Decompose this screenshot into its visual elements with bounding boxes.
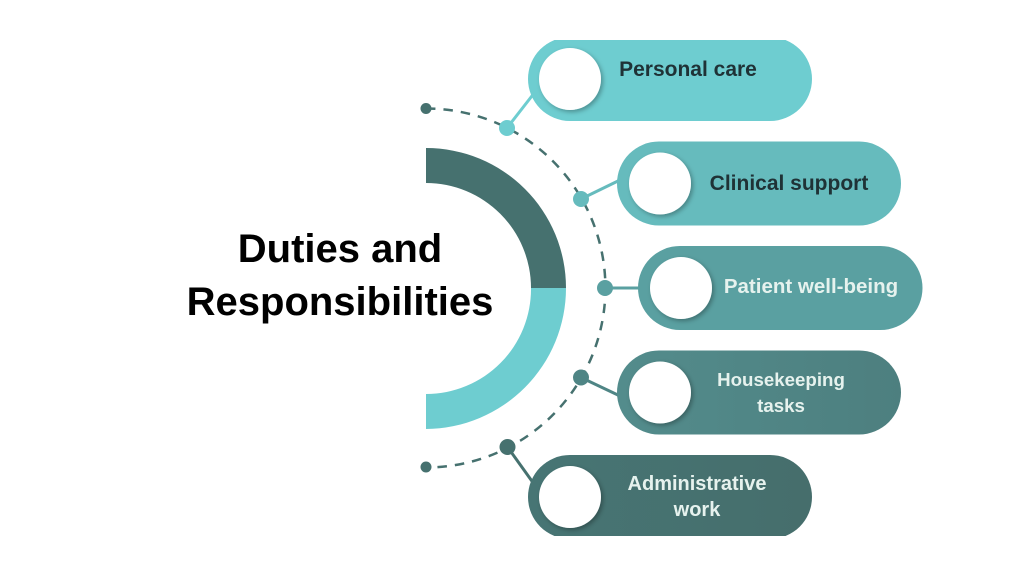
- item: Personal care: Personal care: [619, 58, 757, 81]
- item: Administrative work: [500, 439, 812, 539]
- dashed arc: [420, 103, 605, 472]
- item: Clinical support: [573, 142, 901, 226]
- half ring chart: [426, 148, 566, 429]
- item: Patient well-being: [597, 246, 922, 330]
- item: Clinical support: Clinical support: [710, 172, 868, 195]
- item: Housekeeping tasks: tasks: [757, 395, 805, 416]
- title: Duties and: [238, 227, 442, 271]
- item: Patient well-being: Patient well-being: [724, 275, 898, 298]
- item: Administrative work: Administrative: [628, 473, 766, 495]
- title: [187, 227, 493, 324]
- item: Personal care: [499, 37, 812, 136]
- item: Housekeeping tasks: [573, 350, 901, 434]
- item: Administrative work: work: [673, 499, 721, 521]
- item: Housekeeping tasks: Housekeeping: [717, 369, 845, 390]
- title: Responsibilities: [187, 280, 493, 324]
